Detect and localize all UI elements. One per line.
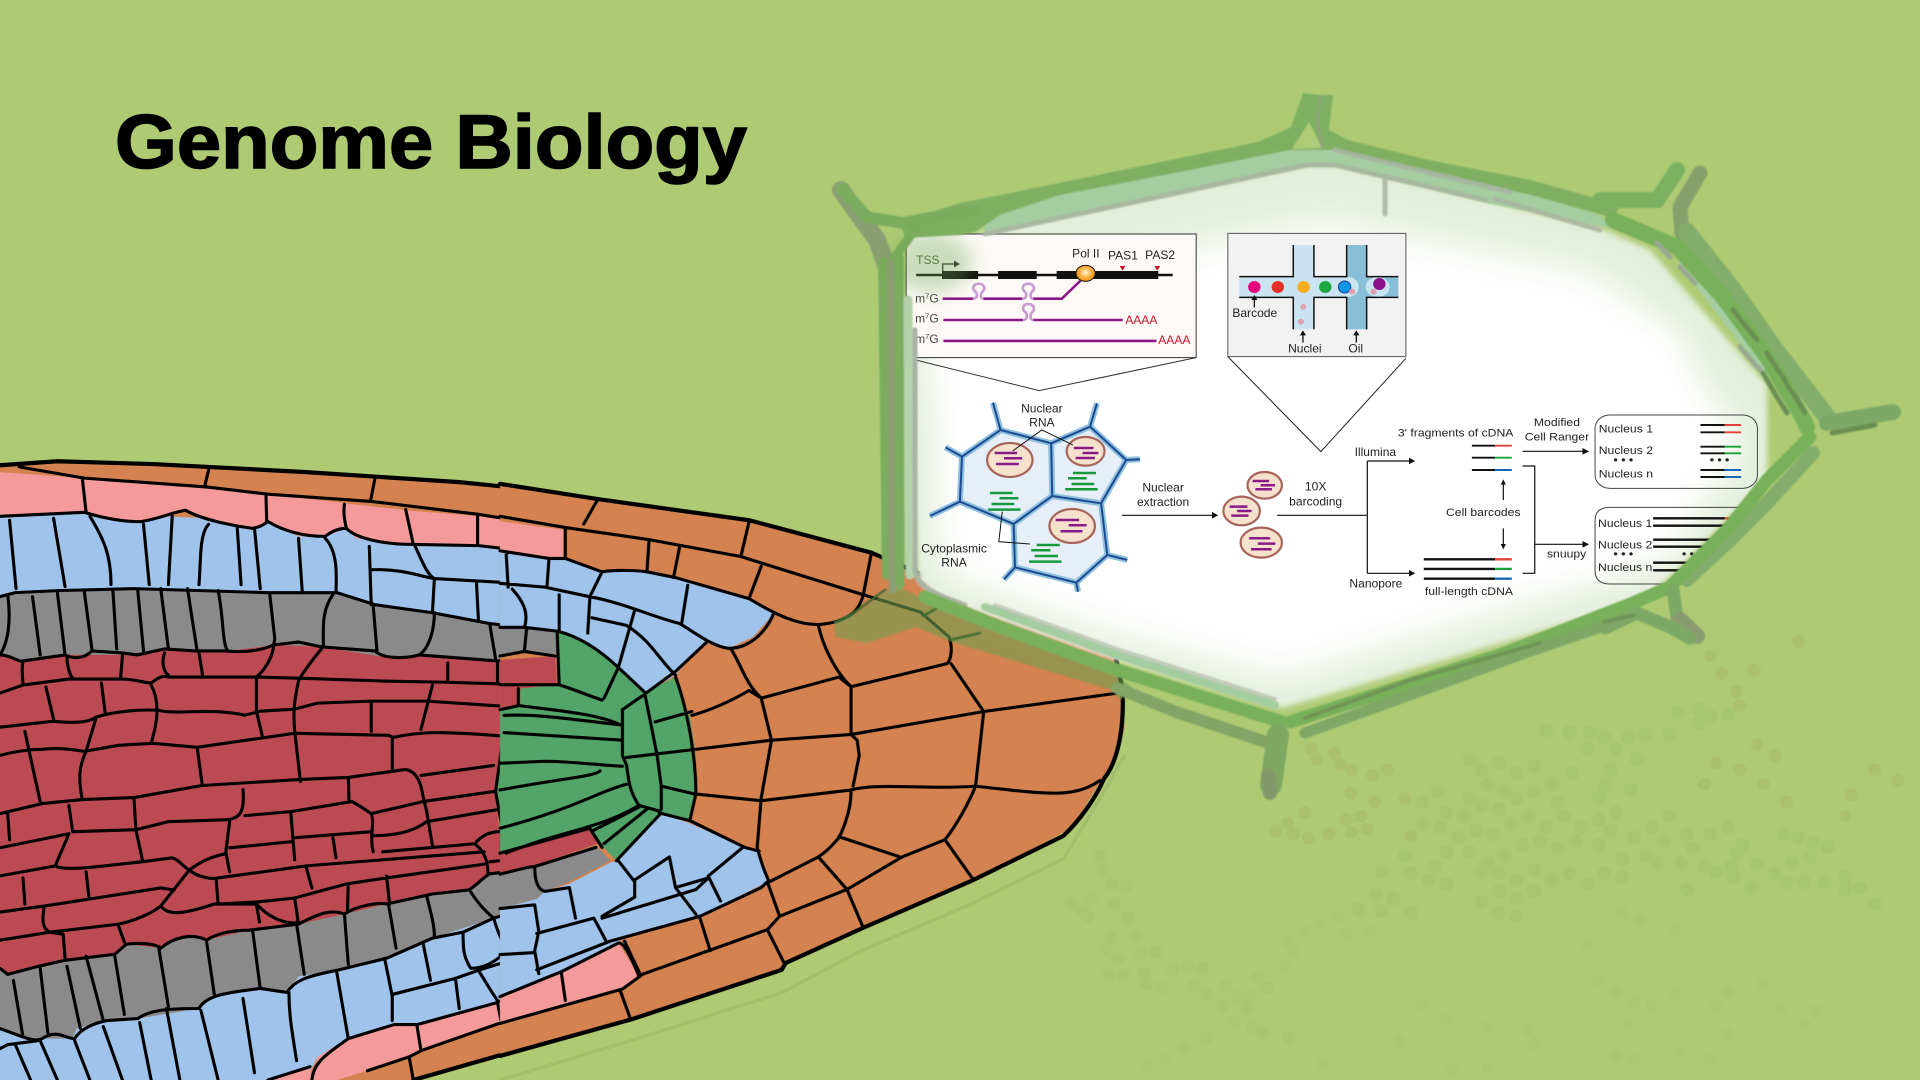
channels <box>1239 245 1398 329</box>
panel: transcript box <box>906 234 1196 391</box>
cell labels: 10X <box>1305 480 1326 494</box>
chip labels and arrows: Oil <box>1348 342 1363 356</box>
lower right wall strands <box>1290 437 1813 733</box>
cell walls left <box>0 459 500 1080</box>
zoom wedge <box>906 358 1196 391</box>
diagram part 2: sequencing outputs <box>1398 415 1757 598</box>
transcript labels: G <box>929 332 939 346</box>
nuclei in cells <box>987 437 1282 558</box>
top grey band <box>0 590 500 660</box>
output box: Cell Ranger nuclei: • • • <box>1710 454 1729 466</box>
full-length cDNA: full-length cDNA <box>1425 586 1513 598</box>
chip labels and arrows <box>1232 295 1363 356</box>
lower pink band <box>314 1003 500 1080</box>
output box: Cell Ranger nuclei: Nucleus n <box>1599 468 1653 480</box>
cell labels <box>921 401 1342 570</box>
cell cytoplasm fill <box>960 427 1126 583</box>
diagram part 1: polyadenylation box, droplet chip, nuclei <box>906 233 1415 592</box>
transcript labels: m <box>915 332 925 346</box>
cell labels: RNA <box>941 556 967 570</box>
gene track <box>916 261 1173 279</box>
dark wall lines seen through tint <box>835 590 980 640</box>
chip labels and arrows: Nuclei <box>1288 342 1322 356</box>
root tip: left portion <box>0 459 500 1080</box>
cell labels: RNA <box>1029 416 1055 430</box>
flow arrows: Nanopore <box>1349 576 1403 590</box>
flow arrows: Illumina <box>1355 445 1397 459</box>
cell barcode label with arrows <box>1446 479 1521 549</box>
transcripts <box>943 281 1157 341</box>
output box: snuupy nuclei: • • <box>1682 548 1694 560</box>
transcript labels: m <box>915 312 925 326</box>
full-length cDNA <box>1424 559 1513 598</box>
cell labels: Cytoplasmic <box>921 541 987 555</box>
cell barcode label with arrows: Cell barcodes <box>1446 507 1521 519</box>
output box: snuupy nuclei: Nucleus 2 <box>1598 539 1652 551</box>
spike notch <box>1292 122 1322 149</box>
RNA polymerase <box>1076 265 1095 281</box>
top blue band <box>0 514 500 624</box>
zoom wedge <box>1228 357 1406 452</box>
top grey membrane <box>985 150 1600 234</box>
transcript labels: Pol II <box>1072 247 1100 260</box>
transcript labels: m <box>915 292 925 305</box>
cDNA fragments: 3' fragments of cDNA <box>1398 427 1514 440</box>
transcript labels: 7 <box>925 291 929 300</box>
cell labels: Nuclear <box>1142 481 1184 495</box>
output box: snuupy nuclei: • • • <box>1614 548 1633 560</box>
cell labels: Nuclear <box>1021 401 1063 415</box>
white cell interior panel <box>908 165 1767 708</box>
green haze over transcript box corner <box>888 232 972 292</box>
connectors: Cell Ranger <box>1525 431 1589 444</box>
pale cell halo <box>908 165 1767 708</box>
transcript labels: AAAA <box>1158 333 1191 347</box>
green meristem <box>500 633 696 861</box>
output box: Cell Ranger nuclei: Nucleus 2 <box>1599 445 1653 457</box>
droplets <box>1248 278 1386 325</box>
lower left wall strands <box>925 597 1282 745</box>
cell labels: extraction <box>1137 495 1189 509</box>
flow arrows <box>1122 445 1415 590</box>
upper blue cells <box>500 553 773 692</box>
output box: snuupy nuclei: Nucleus n <box>1598 562 1652 574</box>
transcript labels: TSS <box>916 253 940 267</box>
lower red cell <box>500 828 598 872</box>
top pink band <box>0 472 500 546</box>
lower grey cells <box>500 847 610 909</box>
root tip silhouette <box>500 484 1125 1056</box>
red central band <box>0 645 500 973</box>
top pale strip <box>985 150 1620 235</box>
transcript labels: 7 <box>925 312 929 321</box>
tint over root at lower left <box>835 587 1135 700</box>
transcript labels: PAS1 <box>1108 249 1138 263</box>
faint root shadow <box>500 756 1125 1080</box>
output box: Cell Ranger nuclei <box>1595 415 1757 488</box>
lower blue band <box>0 914 500 1080</box>
nuclear RNA bars <box>995 448 1275 549</box>
cell wall <box>835 93 1893 793</box>
transcript labels: PAS2 <box>1145 248 1175 262</box>
transcript labels: 7 <box>925 332 929 341</box>
cell walls <box>930 403 1140 592</box>
side fill to keep diagram white <box>930 330 1680 560</box>
chip labels and arrows: Barcode <box>1232 306 1278 320</box>
lower pink cells <box>500 943 639 1023</box>
cDNA fragments <box>1398 427 1514 470</box>
upper right spike <box>1600 170 1700 233</box>
upper pink cell <box>500 521 563 558</box>
upper grey cells <box>500 627 557 657</box>
output box: snuupy nuclei: Nucleus 1 <box>1598 518 1652 530</box>
output box: Cell Ranger nuclei: Nucleus 1 <box>1599 423 1653 435</box>
upper red cells <box>500 656 557 710</box>
transcript labels: G <box>929 312 939 326</box>
connectors <box>1523 417 1589 573</box>
leader lines <box>999 430 1073 544</box>
root left silhouette <box>0 464 500 1080</box>
white core <box>935 222 1735 680</box>
cytoplasmic RNA bars <box>988 473 1098 562</box>
transcript labels: AAAA <box>1125 313 1157 327</box>
green left part <box>497 769 500 827</box>
right wall strands <box>1613 220 1893 433</box>
root tip: right portion <box>500 484 1125 1080</box>
cell walls right <box>500 484 1123 1056</box>
transcript labels <box>915 247 1191 347</box>
left wall strands <box>841 189 973 605</box>
lower blue cells <box>500 813 767 997</box>
background speckles <box>1070 641 1898 1070</box>
plant cells diagram <box>921 401 1415 592</box>
connectors: snuupy <box>1547 548 1587 560</box>
title: Genome Biology <box>115 100 747 185</box>
panel: droplet microfluidic chip <box>1228 233 1406 452</box>
transcript labels: G <box>929 292 939 305</box>
bottom spike <box>1268 735 1278 793</box>
connectors: Modified <box>1534 417 1580 429</box>
lower grey band <box>0 874 500 1038</box>
cell labels: barcoding <box>1289 494 1342 508</box>
output box: Cell Ranger nuclei: • • • <box>1614 454 1633 466</box>
output box: snuupy nuclei <box>1595 507 1744 584</box>
top wall with spike <box>900 93 1620 238</box>
